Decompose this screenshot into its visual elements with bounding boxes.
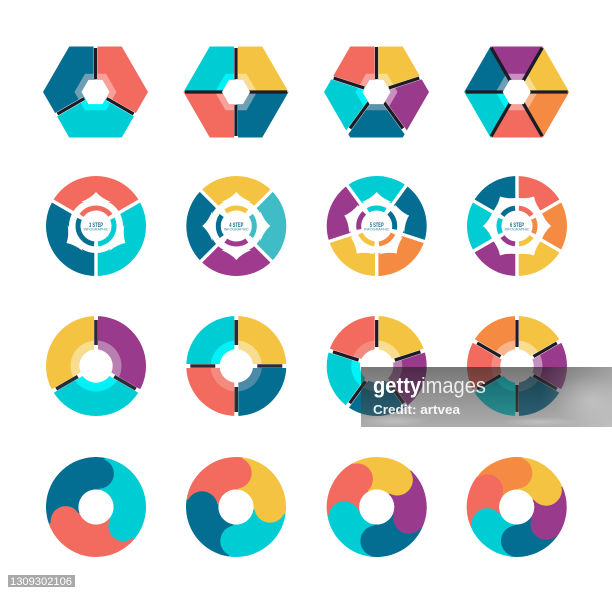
star wheel: 4 step [186,176,286,276]
hexagon: 5 steps [324,46,429,138]
dividers [49,38,142,119]
star center [59,192,133,256]
segments [186,316,286,416]
hexagon: 6 steps [464,46,570,138]
segments [326,316,427,416]
rounded heads [46,457,144,547]
center hole [500,349,534,383]
dividers [466,48,568,136]
star wheel: 6 step [467,176,567,276]
segments [467,176,567,276]
star center [202,192,270,260]
label: 4 STEP [229,222,244,229]
inner pale ring [351,340,402,392]
center hole [220,349,253,383]
watermark wordmark: gettyimages [373,373,486,398]
segments [184,46,288,138]
center hole [503,80,531,104]
segments [198,469,274,545]
inner pale hexagon [496,74,537,110]
inner arcs [211,201,261,251]
rounded heads [466,457,568,557]
dividers [325,312,428,410]
swirl: 6 steps [466,457,568,557]
dividers [185,38,287,146]
rounded heads [325,457,429,557]
inner arcs [492,201,542,251]
dividers [470,312,564,420]
swirl: 5 steps [325,457,429,557]
inner pale hexagon [216,74,256,110]
star center [340,192,414,262]
label: 5 STEP [370,222,384,229]
center hole [82,80,110,104]
center hole [222,80,250,104]
label [504,222,530,232]
donut: 4 steps [186,316,286,416]
segments [329,459,424,555]
inner pale ring [492,340,542,392]
segments [324,46,429,138]
center hole [79,349,113,383]
center hole [78,490,114,524]
swirl: 3 steps [46,457,144,555]
label [84,222,109,232]
center hole [362,80,390,104]
label [224,222,249,232]
star center [483,189,551,263]
hexagon: 3 steps [43,46,148,138]
label: INFOGRAPHIC [224,228,249,232]
center hole [359,490,394,524]
donut: 6 steps [467,316,567,416]
inner pale hexagon [74,74,116,110]
watermark credit: Credit: artvea [373,402,461,417]
segments [46,176,146,276]
donut: 5 steps [326,316,427,416]
dividers [182,312,290,420]
segments [46,316,146,416]
white gaps [323,181,430,282]
donut: 3 steps [46,316,146,416]
center hole [218,490,254,524]
inner arcs [71,201,121,251]
white gaps [48,198,144,282]
label: 6 STEP [510,222,524,229]
center hole [360,349,393,383]
dividers [324,37,429,136]
white gaps [469,170,565,282]
white gaps [197,186,276,266]
star wheel: 3 step [46,176,146,276]
label: INFOGRAPHIC [364,228,390,232]
center hole [499,490,534,524]
label [364,222,390,232]
hexagon: 4 steps [184,46,288,138]
label: INFOGRAPHIC [84,228,109,232]
segments [186,176,286,276]
swirl: 4 steps [186,457,286,557]
label: INFOGRAPHIC [504,228,530,232]
image id caption: 1309302106 [10,576,72,588]
watermark band [361,367,612,427]
label: 3 STEP [89,222,103,229]
dividers [49,312,143,393]
segments [48,459,144,555]
rounded heads [186,457,286,557]
inner arcs [351,201,402,251]
inner pale hexagon [356,74,398,110]
segments [470,460,564,554]
segments [326,176,427,276]
segments [467,316,567,416]
inner pale ring [70,340,122,392]
segments [43,46,148,138]
segments [464,46,570,138]
star wheel: 5 step [326,176,427,276]
inner pale ring [211,340,262,392]
